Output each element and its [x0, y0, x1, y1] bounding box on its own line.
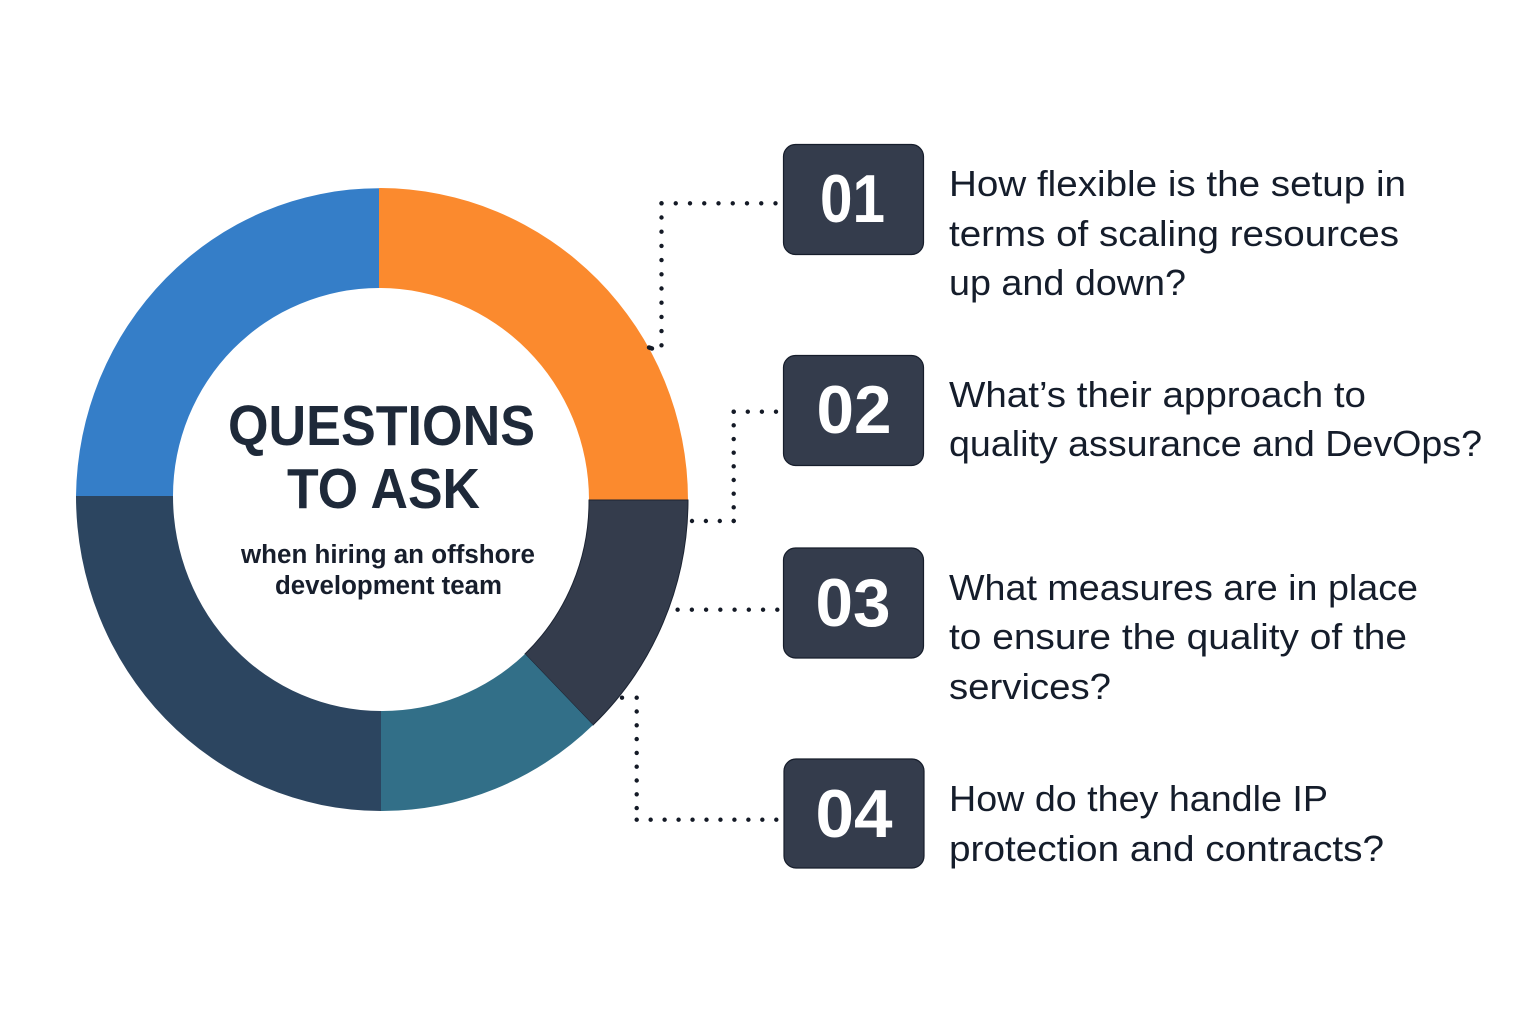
item 01	[784, 144, 1406, 303]
segment: blue	[76, 188, 379, 496]
connector 04	[620, 696, 776, 820]
question 04	[949, 778, 1384, 869]
question 01: up and down?	[949, 262, 1186, 303]
badge 02: 02	[816, 372, 892, 448]
center title	[228, 394, 535, 600]
question 01: How flexible is the setup in	[949, 163, 1406, 204]
question 01	[949, 163, 1406, 303]
segment: navy	[76, 496, 381, 811]
question 04: How do they handle IP	[949, 778, 1328, 819]
connector 02	[692, 412, 776, 521]
question 03: What measures are in place	[949, 567, 1418, 608]
question 03: to ensure the quality of the	[949, 616, 1407, 657]
badge 03: 03	[816, 565, 890, 641]
segment: teal	[381, 654, 593, 811]
badge 04	[784, 759, 924, 868]
question 02: What’s their approach to	[949, 374, 1366, 415]
question 03	[949, 567, 1418, 707]
heading: questions to ask: QUESTIONS	[228, 394, 535, 458]
badge 01	[784, 144, 924, 254]
badge 01: 01	[820, 161, 885, 237]
subtitle	[240, 541, 535, 600]
segment: dark slate	[525, 500, 688, 725]
badge 02	[784, 356, 924, 466]
question 04: protection and contracts?	[949, 828, 1384, 869]
question 02	[949, 374, 1482, 464]
question 01: terms of scaling resources	[949, 213, 1399, 254]
heading: questions to ask	[228, 394, 535, 521]
item 03	[784, 548, 1418, 707]
question 03: services?	[949, 666, 1111, 707]
connector 03	[678, 608, 777, 612]
donut chart	[76, 188, 688, 811]
subtitle: development team	[275, 572, 502, 600]
segment: orange	[379, 188, 688, 500]
connector 01	[649, 203, 776, 348]
item 04	[784, 759, 1384, 869]
item 02	[784, 356, 1482, 466]
badge 04: 04	[816, 776, 893, 852]
heading: questions to ask: TO ASK	[287, 457, 480, 521]
subtitle: when hiring an offshore	[240, 541, 535, 569]
question 02: quality assurance and DevOps?	[949, 423, 1482, 464]
badge 03	[784, 548, 924, 658]
